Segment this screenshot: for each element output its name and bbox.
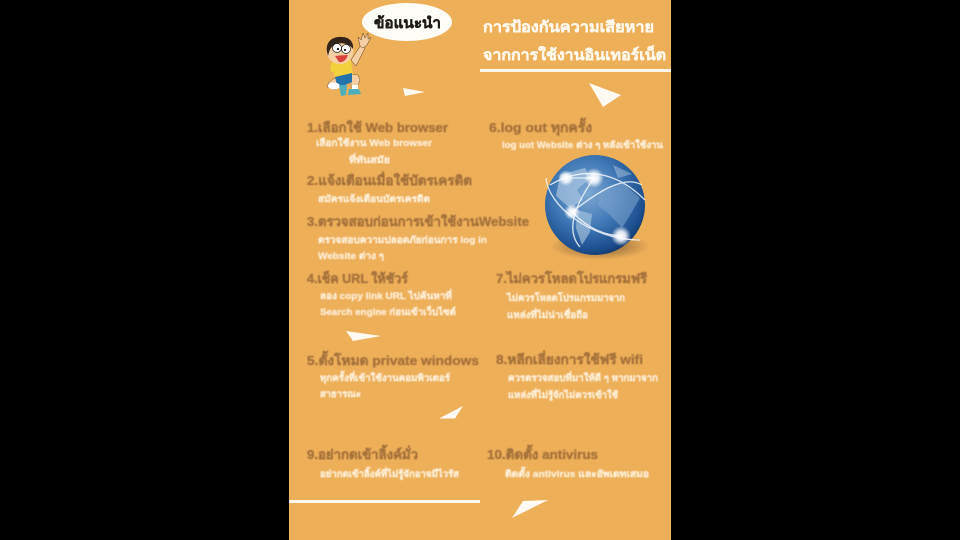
tip 9: อย่ากดเข้าลิ้งค์ที่ไม่รู้จักอาจมีไวรัส [320, 466, 459, 481]
tip 8: แหล่งที่ไม่รู้จักไม่ควรเข้าใช้ [508, 387, 619, 402]
tip 10: ติดตั้ง antivirus และอัพเดทเสมอ [505, 466, 649, 480]
tip 3: ตรวจสอบความปลอดภัยก่อนการ log in [318, 234, 487, 246]
title [483, 19, 666, 64]
tip 8: ควรตรวจสอบที่มาให้ดี ๆ หากมาจาก [508, 370, 658, 384]
tip 5: ทุกครั้งที่เข้าใช้งานคอมพิวเตอร์ [320, 370, 451, 384]
tips text [307, 117, 664, 481]
tip 7: ไม่ควรโหลดโปรแกรมมาจาก [506, 292, 625, 304]
tip 7 [496, 270, 647, 321]
tip 5: 5.ตั้งโหมด private windows [307, 350, 479, 368]
speech bubble heading [362, 3, 452, 41]
tip 9 [307, 444, 459, 481]
tip 2: สมัครแจ้งเตือนบัตรเครดิต [318, 193, 430, 205]
speech bubble heading: ข้อแนะนำ [374, 15, 441, 32]
tip 7: แหล่งที่ไม่น่าเชื่อถือ [507, 307, 588, 321]
tip 10: 10.ติดตั้ง antivirus [487, 444, 598, 462]
title: จากการใช้งานอินเทอร์เน็ต [483, 45, 666, 64]
tip 6: log uot Website ต่าง ๆ หลังเข้าใช้งาน [502, 139, 664, 151]
tip 3: 3.ตรวจสอบก่อนการเข้าใช้งานWebsite [307, 213, 529, 229]
tip 4: 4.เช็ค URL ให้ชัวร์ [307, 269, 408, 286]
tip 6 [489, 117, 664, 151]
tip 2 [307, 171, 472, 205]
tip 4: Search engine ก่อนเข้าเว็บไซต์ [320, 305, 456, 318]
tip 1 [307, 119, 448, 166]
tip 6: 6.log out ทุกครั้ง [489, 117, 592, 136]
tip 3: Website ต่าง ๆ [318, 251, 384, 262]
tip 8: 8.หลีกเลี่ยงการใช้ฟรี wifi [496, 350, 643, 367]
tip 7: 7.ไม่ควรโหลดโปรแกรมฟรี [496, 270, 647, 286]
tip 3 [307, 213, 529, 262]
tip 9: 9.อย่ากดเข้าลิ้งค์มั่ว [307, 444, 418, 462]
tip 1: 1.เลือกใช้ Web browser [307, 119, 448, 135]
tip 1: เลือกใช้งาน Web browser [316, 137, 432, 149]
title: การป้องกันความเสียหาย [483, 19, 654, 36]
tip 5 [307, 350, 479, 400]
tip 1: ที่ทันสมัย [349, 152, 390, 166]
tip 10 [487, 444, 649, 480]
tip 4 [307, 269, 456, 318]
decorative white triangles [346, 83, 621, 518]
footer rule [289, 500, 480, 503]
orange poster panel [289, 0, 671, 540]
tip 5: สาธารณะ [320, 389, 361, 400]
tip 2: 2.แจ้งเตือนเมื่อใช้บัตรเครดิต [307, 171, 472, 188]
icon: waving cartoon boy [326, 33, 371, 96]
icon: network globe [545, 155, 650, 260]
title underline [480, 69, 671, 72]
tip 4: ลอง copy link URL ไปค้นหาที่ [320, 288, 452, 302]
tip 8 [496, 350, 658, 402]
